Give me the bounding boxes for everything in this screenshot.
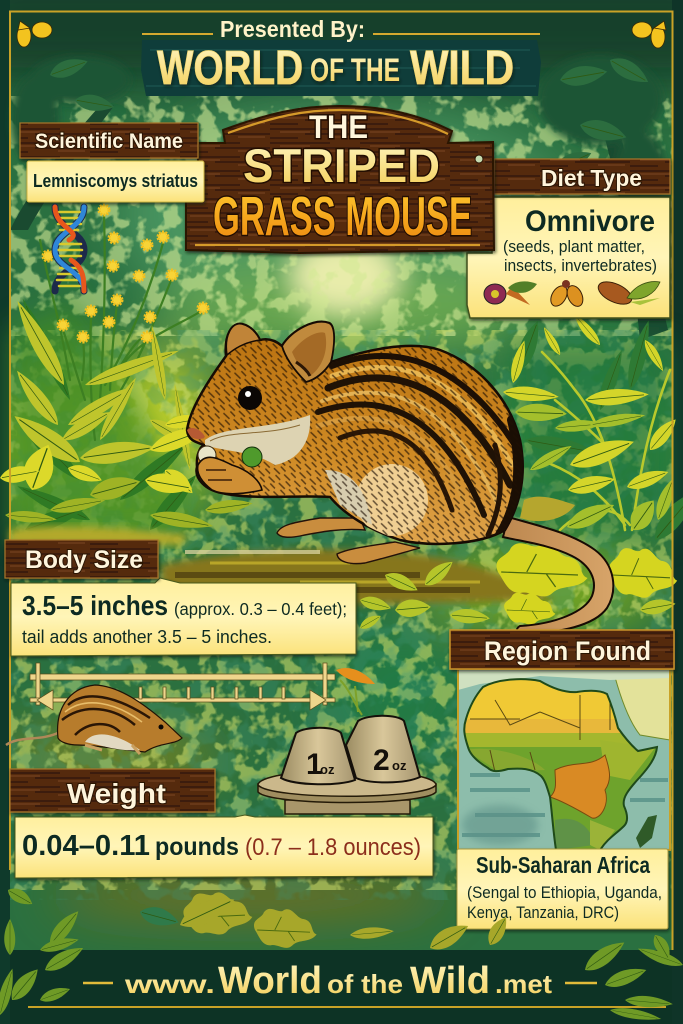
- main mouse illustration: [180, 320, 613, 633]
- brand: world of the wild: WORLD: [157, 42, 303, 95]
- scientific name label board: [20, 123, 198, 158]
- title line: grass mouse: GRASS MOUSE: [213, 185, 472, 247]
- weight: 1 oz: [281, 728, 355, 784]
- ruler with arrows: [30, 663, 335, 710]
- sign hole: [475, 155, 483, 163]
- title sign: [186, 106, 494, 253]
- mouse tail: [503, 517, 613, 633]
- mouse ear: [282, 322, 334, 382]
- mouse cheek: [205, 415, 310, 465]
- weight value panel: 0.04–0.11: [22, 830, 150, 862]
- diet type panel: (seeds, plant matter,: [503, 237, 645, 256]
- mouse far ear: [226, 324, 260, 355]
- balance plate with weights: [258, 716, 436, 814]
- icon: left corner bee: [17, 21, 52, 47]
- brand: world of the wild: [157, 42, 514, 95]
- icon: right corner bee: [632, 21, 666, 48]
- region found label board: [450, 630, 674, 669]
- icon: dna helix: [55, 207, 84, 291]
- canopy texture: [10, 96, 672, 336]
- weight: 2 oz: 2: [373, 744, 390, 777]
- footer website: www.: [124, 969, 215, 999]
- weight: 2 oz: oz: [392, 758, 407, 773]
- panel: weight: [10, 769, 433, 878]
- icon: insect: [547, 280, 586, 309]
- ground and foreground leaves under mouse: [160, 543, 677, 632]
- trees top corners: [10, 52, 668, 340]
- icon: orange flower: [336, 668, 375, 715]
- icon: invertebrate and leaf: [595, 277, 660, 309]
- footer website: of the: [327, 969, 403, 999]
- banner: presented by: [141, 16, 541, 96]
- mouse stripes: [318, 356, 518, 535]
- mouse paw and food: [198, 446, 262, 494]
- region value panel: Kenya, Tanzania, DRC): [467, 903, 619, 922]
- body size value panel: tail adds another 3.5 – 5 inches.: [22, 627, 272, 647]
- diet type label board: [494, 159, 670, 194]
- footer website: [83, 960, 597, 1002]
- mouse body: [187, 322, 523, 544]
- body size value panel: (approx. 0.3 – 0.4 feet);: [174, 599, 347, 619]
- mouse belly patch: [356, 464, 428, 536]
- bottom foliage: [0, 884, 683, 1023]
- left grass and flowers: [0, 205, 253, 545]
- scientific name value: Lemniscomys striatus: [33, 171, 198, 191]
- plate: [258, 770, 436, 814]
- scientific name label board: Scientific Name: [35, 130, 183, 153]
- title line: striped: STRIPED: [243, 139, 440, 192]
- footer website: Wild: [410, 960, 490, 1002]
- icon: seeds and leaf: [484, 281, 537, 305]
- region value panel: (Sengal to Ethiopia, Uganda,: [467, 883, 662, 902]
- diet type panel: [467, 197, 670, 318]
- mouse hind foot: [337, 542, 420, 564]
- mouse nose: [187, 428, 205, 439]
- weight value panel: pounds: [155, 833, 239, 861]
- title line: the: THE: [309, 109, 368, 145]
- mouse front foot: [277, 518, 365, 537]
- weight label board: Weight: [67, 778, 166, 809]
- mouse fur texture: [188, 340, 513, 543]
- weight value panel: [15, 815, 433, 878]
- diet type panel: Omnivore: [525, 205, 655, 238]
- region value panel: [457, 849, 668, 929]
- weight label board: [10, 769, 215, 812]
- body size label board: Body Size: [25, 546, 143, 574]
- presented by heading: Presented By:: [220, 16, 365, 42]
- right plants: [502, 311, 683, 546]
- africa map: [458, 669, 670, 850]
- panel: region found: [450, 630, 674, 929]
- body size value panel: 3.5–5 inches: [22, 590, 168, 621]
- diet type panel: insects, invertebrates): [504, 256, 657, 275]
- small mouse illustration: [6, 685, 182, 754]
- panel: diet type: [467, 159, 670, 318]
- scientific name value: [27, 161, 204, 202]
- panel: body size: [5, 540, 356, 656]
- brand: world of the wild: OF THE: [310, 52, 400, 88]
- panel: scientific name: [20, 123, 204, 202]
- body size value panel: [11, 578, 356, 656]
- footer website: World: [218, 960, 322, 1002]
- weight: 1 oz: 1: [306, 748, 323, 781]
- brand: world of the wild: WILD: [410, 42, 514, 95]
- region found label board: Region Found: [484, 636, 651, 666]
- footer website: .met: [495, 969, 552, 999]
- body size label board: [5, 540, 158, 578]
- region value panel: Sub-Saharan Africa: [476, 852, 650, 878]
- yellow flowers: [43, 205, 208, 342]
- diet type label board: Diet Type: [541, 165, 642, 191]
- weight: 2 oz: [346, 716, 420, 782]
- weight value panel: (0.7 – 1.8 ounces): [245, 834, 421, 861]
- weight: 1 oz: oz: [320, 762, 335, 777]
- mouse eye: [238, 386, 262, 410]
